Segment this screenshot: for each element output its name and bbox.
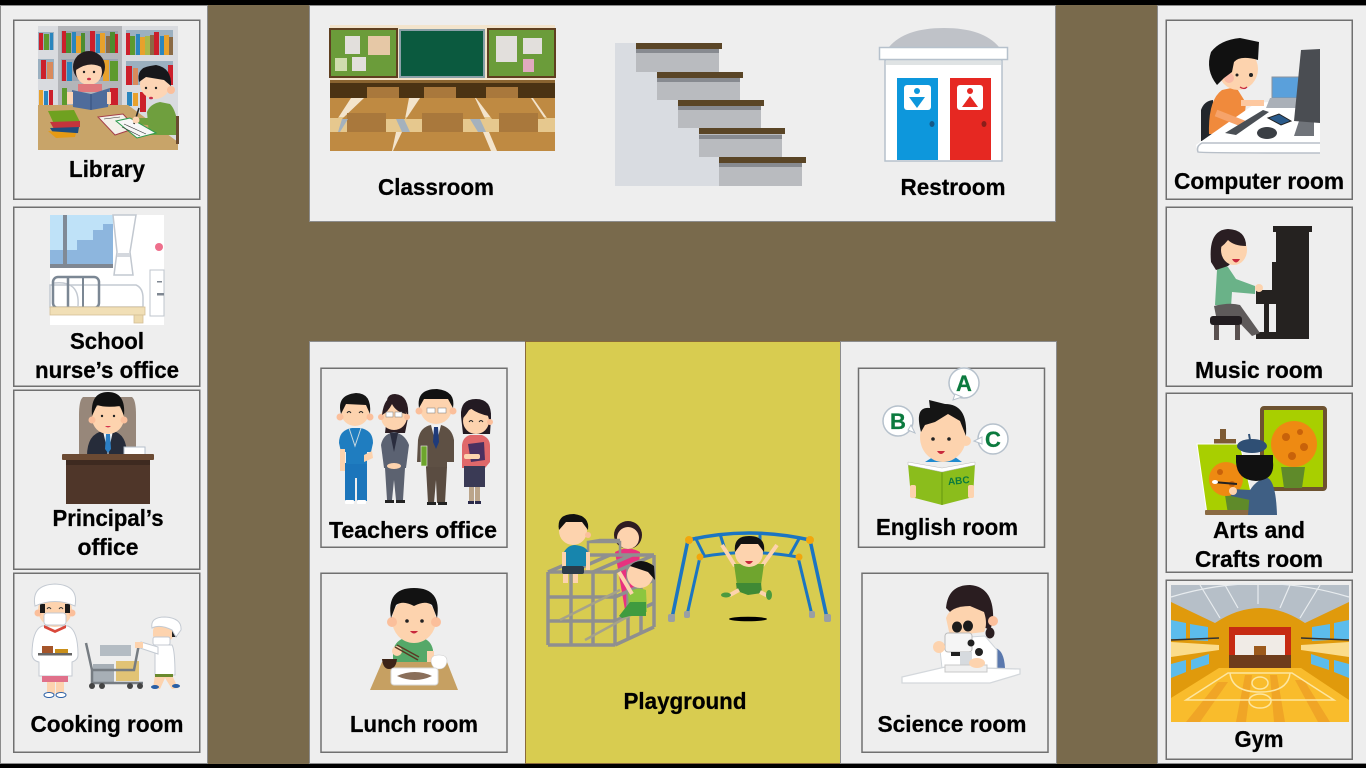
panel: playground <box>526 342 840 764</box>
icon: pianist <box>1210 226 1312 340</box>
label: cooking room: Cooking room <box>30 711 184 737</box>
label: music room: Music room <box>1195 357 1323 383</box>
icon: teachers <box>336 389 493 505</box>
card: cooking room <box>14 573 200 752</box>
child: boy climbing <box>619 561 655 618</box>
icon: library <box>38 26 179 150</box>
label: lunch room: Lunch room <box>350 711 478 737</box>
card: english room <box>858 368 1044 547</box>
label: science room: Science room <box>878 711 1026 737</box>
card: arts and crafts room <box>1166 393 1352 572</box>
card: lunch room <box>321 573 507 752</box>
card: principal's office: office <box>78 534 138 560</box>
label: library: Library <box>69 156 145 182</box>
card: teachers office <box>321 368 507 547</box>
label: principal's office: Principal’s <box>52 505 164 531</box>
card: arts and crafts room: Crafts room <box>1195 546 1323 572</box>
icon: gymnasium <box>1171 584 1349 722</box>
icon: nurse's office bed <box>50 215 164 325</box>
card: computer room <box>1166 20 1352 199</box>
icon: boy eating lunch <box>370 588 458 690</box>
icon: restroom <box>880 28 1008 161</box>
card: school nurse's office: nurse’s office <box>35 357 179 383</box>
small cook <box>135 617 181 689</box>
label: teachers office: Teachers office <box>329 517 497 543</box>
panel: left wing <box>0 6 208 764</box>
panel: top corridor rooms <box>310 6 1056 222</box>
icon: scientist at microscope <box>902 585 1020 683</box>
icon: classroom <box>330 25 555 151</box>
child: girl behind frame <box>614 521 642 610</box>
card: school nurse's office <box>14 207 200 386</box>
icon: cooks with cart <box>32 584 181 698</box>
label: arts and crafts room: Arts and <box>1213 517 1305 543</box>
card: principal's office <box>14 390 200 569</box>
icon: stairs <box>615 43 806 186</box>
label: computer room: Computer room <box>1174 168 1344 194</box>
frame <box>548 540 654 645</box>
speech bubble C: C <box>985 427 1001 452</box>
card: gym <box>1166 580 1352 759</box>
icon: boy at computer <box>1196 38 1320 153</box>
big cook <box>32 584 78 698</box>
label: restroom: Restroom <box>900 174 1006 200</box>
speech bubble A: A <box>956 371 972 396</box>
icon: boy reading ABC: ABC <box>948 475 970 488</box>
panel: right wing <box>1158 6 1366 764</box>
panel: lower left rooms <box>310 342 526 764</box>
icon: painter at easel <box>1197 408 1325 515</box>
label: school nurse's office: School <box>70 328 144 354</box>
label: gym: Gym <box>1234 726 1284 752</box>
icon: principal at desk <box>62 392 154 504</box>
icon: boy reading ABC <box>883 368 1008 505</box>
label: playground: Playground <box>624 688 746 714</box>
card: music room <box>1166 207 1352 386</box>
child: boy on top <box>559 514 591 583</box>
label: english room: English room <box>876 514 1018 540</box>
icon: monkey bars with child <box>668 533 831 622</box>
card: science room <box>862 573 1048 752</box>
icon: jungle gym with children <box>548 514 655 645</box>
panel: lower right rooms <box>840 342 1056 764</box>
label: classroom: Classroom <box>378 174 494 200</box>
cart <box>86 643 143 689</box>
card: library <box>14 20 200 199</box>
speech bubble B: B <box>890 409 906 434</box>
